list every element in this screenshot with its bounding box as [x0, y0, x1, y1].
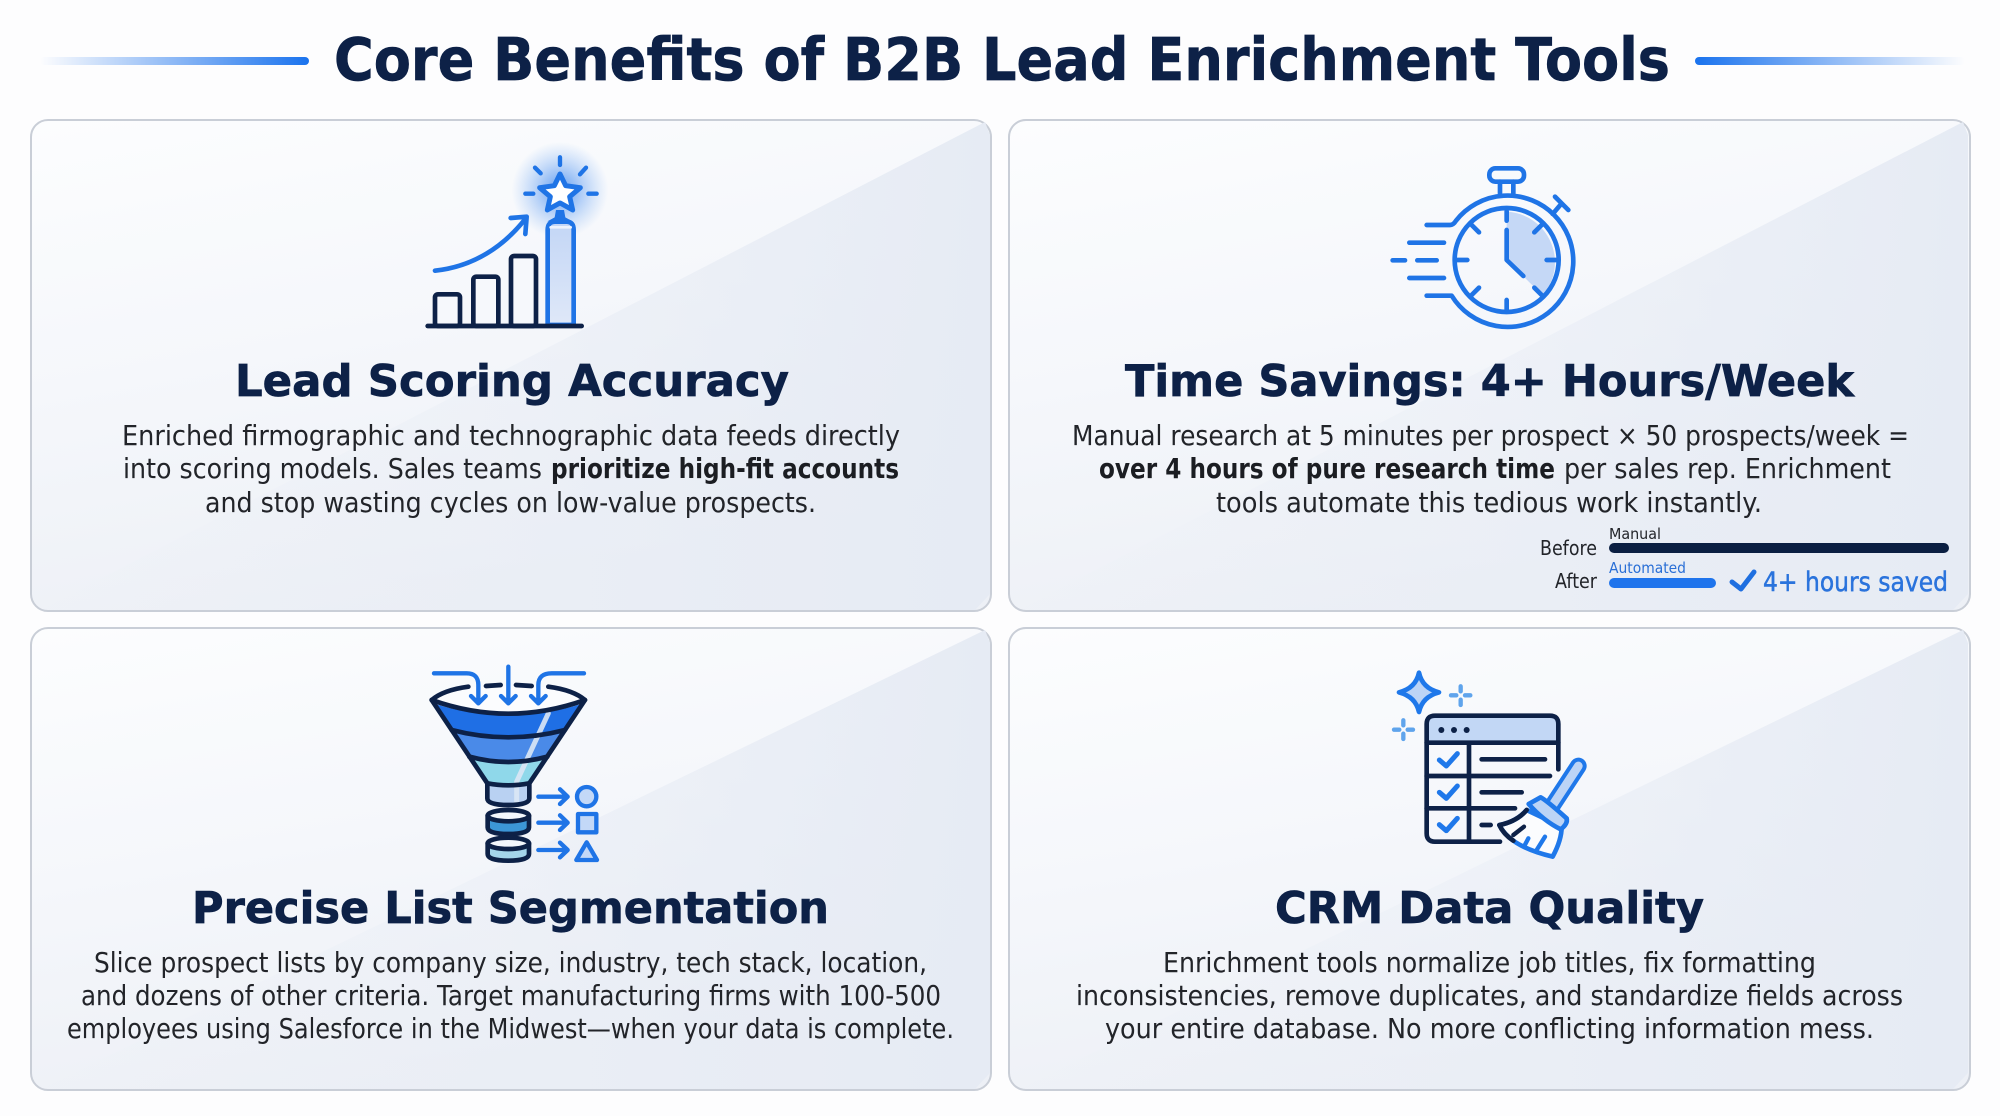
panel: precise list segmentation: [31, 628, 991, 1093]
title accent line: left: [40, 57, 309, 65]
icon: funnel: [432, 667, 597, 861]
body text: [1072, 420, 1909, 519]
before and after comparison: Before: [1540, 536, 1597, 560]
body text: Enrichment tools normalize job titles, fix formatting: [1163, 947, 1816, 979]
before and after comparison: 4+ hours saved: [1763, 567, 1948, 598]
heading: CRM Data Quality: [1275, 883, 1704, 934]
body text: Slice prospect lists by company size, industry, tech stack, location,: [94, 947, 927, 979]
body text: [1076, 947, 1903, 1045]
before and after comparison: [1540, 525, 1949, 598]
before and after comparison: Automated: [1609, 559, 1686, 577]
heading: Lead Scoring Accuracy: [235, 356, 789, 407]
body text: employees using Salesforce in the Midwest—when your data is complete.: [67, 1013, 954, 1045]
body text: your entire database. No more conflicting information mess.: [1105, 1013, 1874, 1045]
title accent line: right: [1695, 57, 1965, 65]
body text: and dozens of other criteria. Target manufacturing firms with 100-500: [81, 980, 941, 1012]
body text: [67, 947, 954, 1045]
body text: inconsistencies, remove duplicates, and standardize fields across: [1076, 980, 1903, 1012]
panel: crm data quality: [1009, 628, 1970, 1093]
heading: Time Savings: 4+ Hours/Week: [1125, 356, 1856, 407]
icon: stopwatch: [1393, 168, 1573, 327]
icon: bar chart with star: [428, 142, 608, 326]
title: Core Benefits of B2B Lead Enrichment Tools: [334, 25, 1670, 94]
panel: lead scoring accuracy: [31, 120, 991, 614]
body text: into scoring models. Sales teams: [123, 453, 542, 485]
before and after comparison: After: [1555, 569, 1597, 593]
body text: prioritize high-fit accounts: [551, 453, 899, 485]
body text: and stop wasting cycles on low-value prospects.: [205, 487, 816, 519]
body text: per sales rep. Enrichment: [1564, 453, 1891, 485]
heading: Precise List Segmentation: [192, 883, 829, 934]
body text: tools automate this tedious work instantly.: [1216, 487, 1762, 519]
body text: Enriched firmographic and technographic data feeds directly: [122, 420, 900, 452]
body text: over 4 hours of pure research time: [1099, 453, 1555, 485]
body text: [122, 420, 900, 519]
panel: time savings: [1009, 120, 1970, 614]
body text: Manual research at 5 minutes per prospect × 50 prospects/week =: [1072, 420, 1909, 452]
icon: data table with broom: [1394, 673, 1578, 857]
before and after comparison: Manual: [1609, 525, 1661, 543]
